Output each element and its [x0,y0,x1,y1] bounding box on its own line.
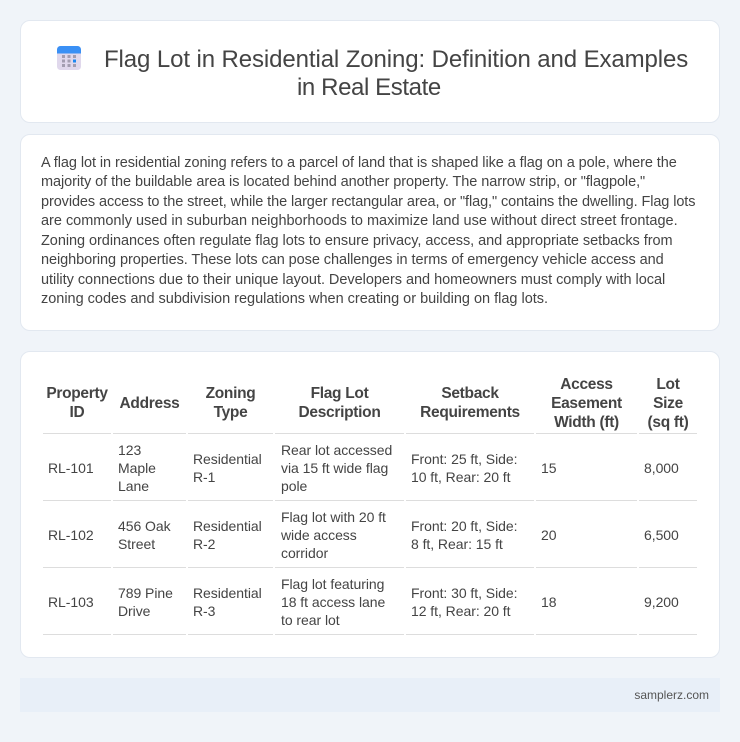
row RL-102: 6,500 [644,527,679,543]
row RL-103: Residential [193,585,262,601]
row RL-101: 10 ft, Rear: 20 ft [411,469,510,485]
row RL-102: Residential [193,518,262,534]
row RL-103: to rear lot [281,612,340,628]
row RL-102: Front: 20 ft, Side: [411,518,517,534]
title [57,46,688,101]
description text: A flag lot in residential zoning refers to a parcel of land that is shaped like a flag on a pole, where the [41,155,677,171]
row RL-103: 18 [541,594,556,610]
table header [46,376,688,431]
row RL-103: 12 ft, Rear: 20 ft [411,603,510,619]
description text: Zoning ordinances often regulate flag lots to ensure privacy, access, and appropriate setbacks from [41,233,673,249]
description text: majority of the buildable area is located behind another property. The narrow strip, or "flagpole," [41,174,645,190]
table header: Flag Lot [311,385,368,402]
table header: (sq ft) [648,414,688,431]
footer source text: samplerz.com [634,688,709,702]
row RL-101: Rear lot accessed [281,442,392,458]
row RL-101: R-1 [193,469,215,485]
row RL-101: via 15 ft wide flag [281,460,388,476]
table header: Easement [551,395,622,412]
row RL-102: wide access [281,527,357,543]
title card [20,20,720,123]
row RL-101: Maple [118,460,156,476]
row RL-102: R-2 [193,536,215,552]
row RL-103: 9,200 [644,594,679,610]
row RL-101: Front: 25 ft, Side: [411,451,517,467]
row RL-101: RL-101 [48,460,94,476]
description text: utility connections due to their unique layout. Developers and homeowners must comply with local [41,272,665,288]
row RL-102: 20 [541,527,556,543]
row RL-103: Flag lot featuring [281,576,384,592]
row RL-101: 15 [541,460,556,476]
row RL-102 [43,509,697,568]
row RL-102: corridor [281,545,328,561]
table header: Lot [656,376,680,393]
row RL-103 [43,576,697,635]
description text: neighboring properties. These lots can pose challenges in terms of emergency vehicle access and [41,252,664,268]
footer bar [20,678,720,712]
table header: Zoning [206,385,255,402]
row RL-102: 8 ft, Rear: 15 ft [411,536,503,552]
description text: zoning codes and subdivision regulations when creating or building on flag lots. [41,291,548,307]
table header: Type [214,404,247,421]
row RL-102: Street [118,536,155,552]
table header: Requirements [420,404,520,421]
description text: provides access to the street, while the larger rectangular area, or "flag," contains the dwelling. Flag lots [41,194,695,210]
row RL-101: Lane [118,478,149,494]
row RL-101: Residential [193,451,262,467]
row RL-103: RL-103 [48,594,94,610]
icon: calendar grid [57,46,81,70]
row RL-103: 789 Pine [118,585,173,601]
row RL-103: Front: 30 ft, Side: [411,585,517,601]
row RL-101: pole [281,478,307,494]
table card [20,351,720,658]
row RL-103: R-3 [193,603,215,619]
row RL-101 [43,442,697,501]
description card [20,134,720,331]
row RL-103: Drive [118,603,150,619]
table header: Access [560,376,613,393]
table header: Property [46,385,108,402]
row RL-101: 8,000 [644,460,679,476]
title: in Real Estate [297,74,441,101]
table header: ID [70,404,84,421]
table header: Width (ft) [554,414,619,431]
table header: Size [653,395,683,412]
table header: Description [299,404,380,421]
row RL-102: Flag lot with 20 ft [281,509,386,525]
description text [41,155,695,307]
table header: Address [120,395,179,412]
row RL-102: RL-102 [48,527,94,543]
header rule [43,433,697,434]
title: Flag Lot in Residential Zoning: Definition and Examples [104,46,688,73]
table [43,376,697,635]
row RL-102: 456 Oak [118,518,171,534]
row RL-101: 123 [118,442,141,458]
table header: Setback [441,385,499,402]
row RL-103: 18 ft access lane [281,594,385,610]
description text: are commonly used in suburban neighborhoods to maximize land use without direct street frontage. [41,213,678,229]
